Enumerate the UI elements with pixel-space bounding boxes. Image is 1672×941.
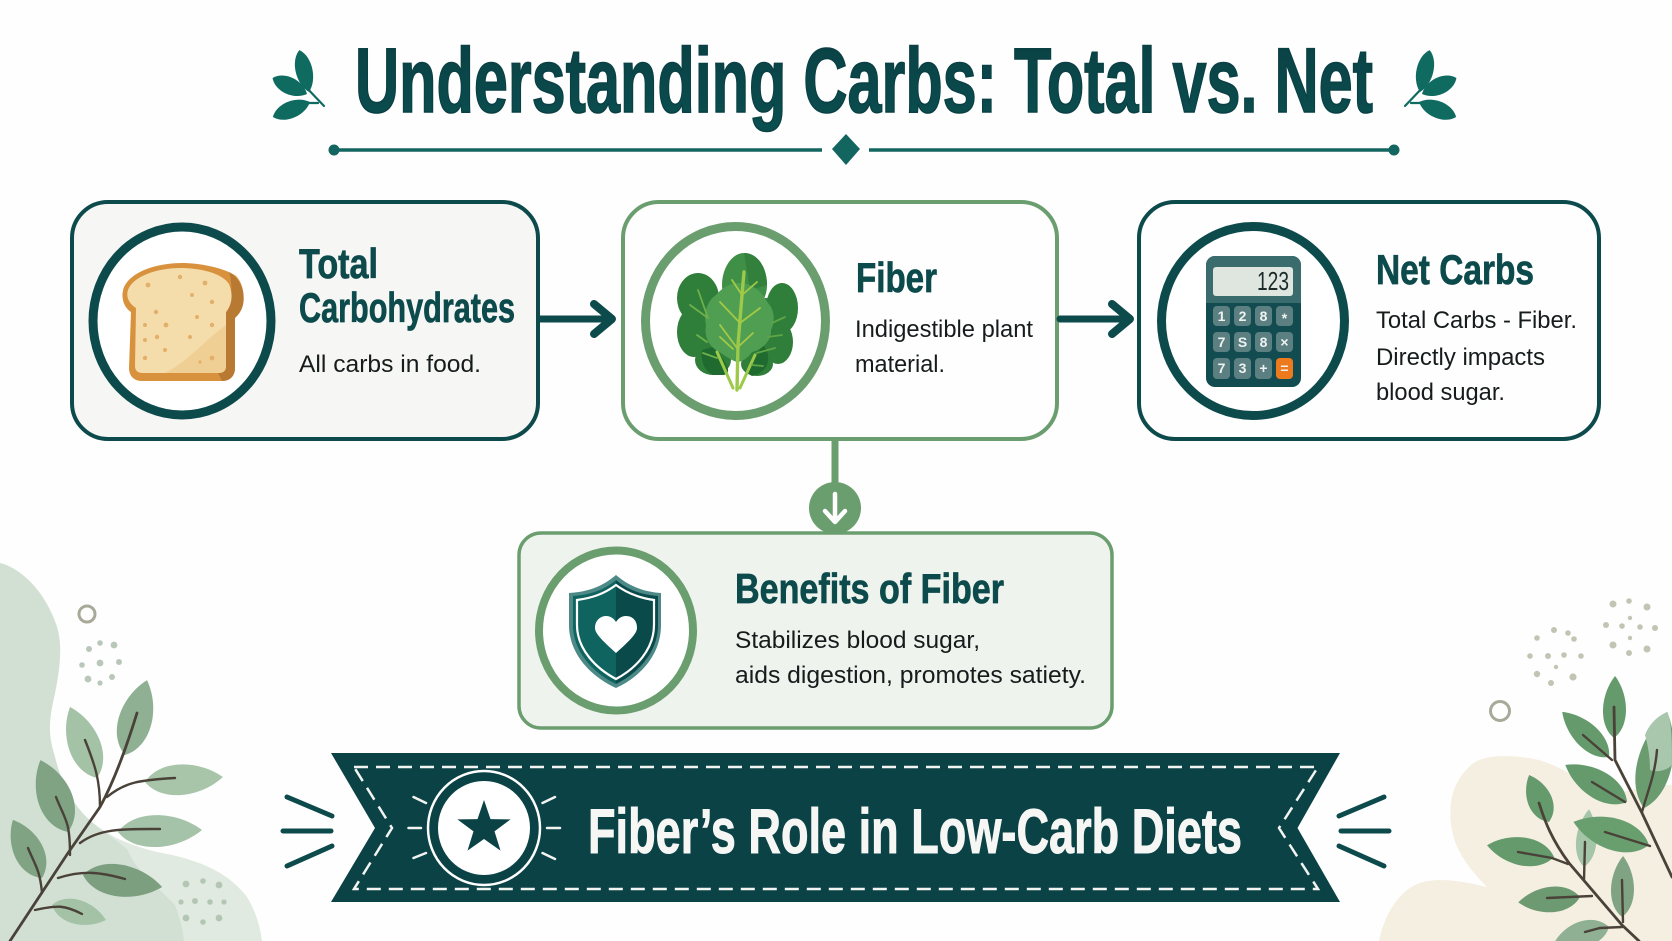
icon: calculator: 1 bbox=[1218, 308, 1226, 324]
text: total carbohydrates description: All carbs in food. bbox=[299, 351, 481, 378]
text: benefits description bbox=[735, 627, 1086, 689]
text: fiber description: Indigestible plant bbox=[855, 316, 1033, 343]
icon: calculator: 123 bbox=[1257, 266, 1289, 296]
arrow: fiber down to benefits bbox=[809, 439, 861, 534]
icon: calculator: = bbox=[1280, 360, 1289, 376]
icon: left title sprig bbox=[269, 48, 324, 125]
icon: calculator: 7 bbox=[1218, 360, 1226, 376]
icon: star badge bbox=[408, 771, 560, 885]
icon: right title sprig bbox=[1405, 48, 1460, 125]
panel: fiber bbox=[623, 202, 1057, 439]
panel: benefits of fiber bbox=[519, 533, 1112, 728]
decoration: bottom-left foliage bbox=[0, 563, 262, 941]
text: fiber description: material. bbox=[855, 351, 945, 378]
heading: total carbohydrates: Carbohydrates bbox=[299, 284, 515, 331]
text: benefits description: Stabilizes blood sugar, bbox=[735, 627, 980, 654]
heading: net carbs: Net Carbs bbox=[1376, 246, 1534, 293]
icon: calculator bbox=[1162, 226, 1344, 416]
icon: bread bbox=[93, 227, 271, 415]
arrow: fiber to net carbs bbox=[1060, 304, 1130, 334]
icon: calculator: S bbox=[1238, 334, 1247, 350]
icon: spinach bbox=[646, 226, 826, 416]
icon: calculator: * bbox=[1282, 310, 1288, 326]
icon: calculator: 8 bbox=[1260, 308, 1268, 324]
heading: total carbohydrates bbox=[299, 240, 515, 331]
text: net carbs description: blood sugar. bbox=[1376, 379, 1505, 406]
icon: calculator: 2 bbox=[1239, 308, 1247, 324]
text: net carbs description bbox=[1376, 307, 1577, 406]
icon: shield with heart bbox=[539, 550, 693, 710]
icon: calculator: × bbox=[1280, 334, 1289, 350]
rays: banner right bbox=[1339, 797, 1389, 866]
icon: calculator: 8 bbox=[1260, 334, 1268, 350]
text: benefits description: aids digestion, promotes satiety. bbox=[735, 662, 1086, 689]
text: fiber description bbox=[855, 316, 1033, 378]
heading: total carbohydrates: Total bbox=[299, 240, 378, 287]
heading: fiber: Fiber bbox=[856, 254, 937, 301]
banner: fiber's role in low-carb diets bbox=[331, 753, 1340, 902]
title divider bbox=[328, 134, 1400, 165]
banner text: Fiber’s Role in Low-Carb Diets bbox=[588, 797, 1242, 867]
heading: benefits of fiber: Benefits of Fiber bbox=[735, 565, 1004, 612]
icon: calculator: 3 bbox=[1239, 360, 1247, 376]
icon: calculator: + bbox=[1259, 360, 1268, 376]
panel: net carbs bbox=[1139, 202, 1599, 439]
arrow: total to fiber bbox=[540, 304, 612, 334]
text: net carbs description: Directly impacts bbox=[1376, 344, 1545, 371]
rays: banner left bbox=[283, 797, 332, 866]
panel: total carbohydrates bbox=[72, 202, 538, 439]
decoration: bottom-right foliage bbox=[1379, 598, 1672, 941]
text: net carbs description: Total Carbs - Fiber. bbox=[1376, 307, 1577, 334]
icon: calculator: 7 bbox=[1218, 334, 1226, 350]
